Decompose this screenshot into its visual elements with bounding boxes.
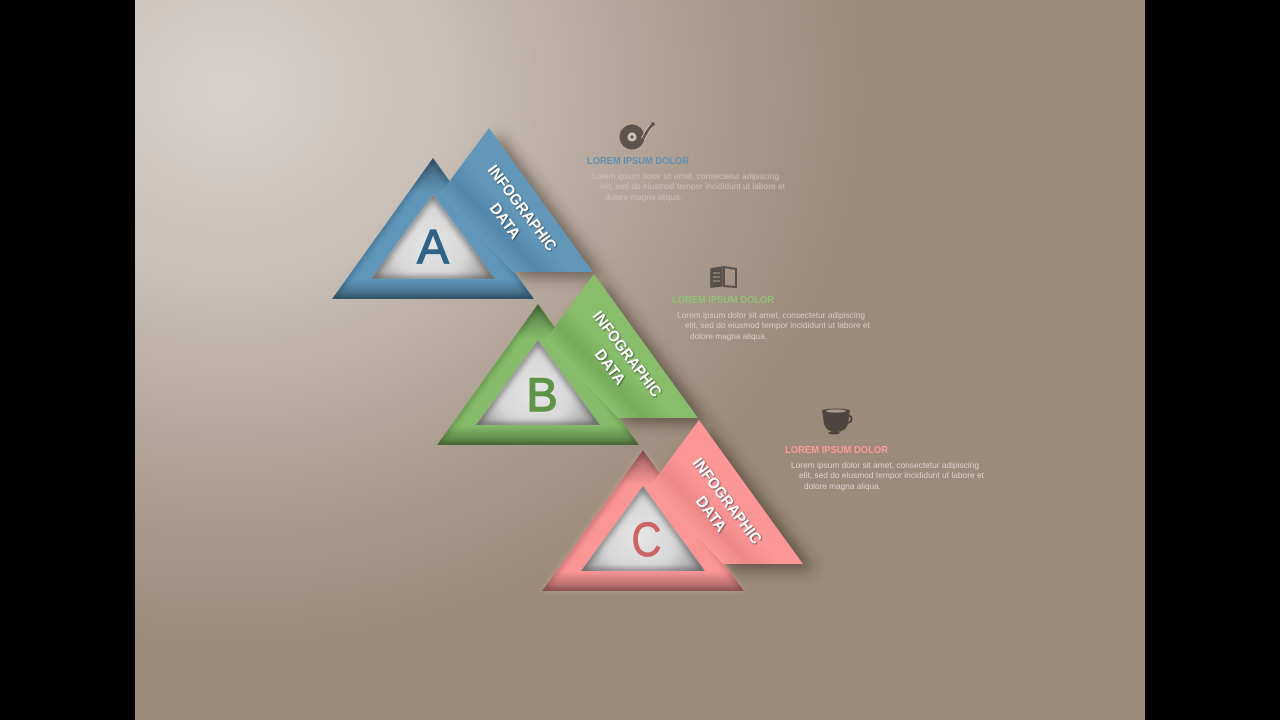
- body C: elit, sed do eiusmod tempor incididunt ut labore et: [799, 470, 985, 480]
- ribbon label B: INFOGRAPHIC: [589, 308, 664, 401]
- ribbon label C: DATA: [692, 493, 729, 535]
- triangle frame C: [542, 450, 744, 591]
- text block C: [785, 445, 985, 491]
- heading B: LOREM IPSUM DOLOR: [672, 295, 775, 306]
- body B: Lorem ipsum dolor sit amet, consectetur adipiscing: [677, 310, 865, 320]
- body C: dolore magna aliqua.: [804, 481, 881, 491]
- body A: dolore magna aliqua.: [605, 192, 682, 202]
- ribbon A: [440, 128, 593, 272]
- frame bevel C: [542, 450, 744, 591]
- icon: open book: [711, 267, 736, 287]
- icon: coffee cup: [822, 408, 852, 434]
- body B: [677, 310, 871, 341]
- icon: turntable record: [620, 122, 655, 150]
- inner triangle C: [581, 486, 705, 571]
- ribbon label A: INFOGRAPHIC: [484, 162, 559, 255]
- inner triangle A: [371, 194, 495, 279]
- triangle group A: [320, 128, 605, 305]
- heading A: LOREM IPSUM DOLOR: [587, 156, 690, 167]
- text block B: [672, 295, 871, 341]
- ribbon shadow A: [450, 134, 605, 278]
- heading C: LOREM IPSUM DOLOR: [785, 445, 889, 456]
- inner bevel C: [581, 486, 705, 571]
- ribbon B: [545, 274, 698, 418]
- ribbon label A: DATA: [486, 200, 523, 242]
- body A: [592, 171, 786, 202]
- inner bevel B: [476, 340, 600, 425]
- body B: elit, sed do eiusmod tempor incididunt ut labore et: [685, 320, 871, 330]
- ribbon shadow C: [660, 426, 815, 570]
- triangle frame B: [437, 304, 639, 445]
- frame bevel B: [437, 304, 639, 445]
- letter B: B: [526, 368, 558, 421]
- body B: dolore magna aliqua.: [690, 331, 767, 341]
- body A: Lorem ipsum dolor sit amet, consectetur adipiscing: [592, 171, 779, 181]
- letter A: A: [417, 221, 449, 274]
- infographic canvas: [332, 122, 984, 592]
- inner bevel A: [371, 194, 495, 279]
- ribbon label B: DATA: [591, 346, 628, 388]
- inner triangle B: [476, 340, 600, 425]
- triangle group B: [425, 274, 710, 451]
- outer frame glow C: [542, 450, 744, 591]
- body C: Lorem ipsum dolor sit amet, consectetur adipiscing: [791, 460, 979, 470]
- background panel: [135, 0, 1145, 720]
- body A: elit, sed do eiusmod tempor incididunt ut labore et: [600, 181, 786, 191]
- ribbon shadow B: [555, 280, 710, 424]
- triangle group C: [530, 420, 815, 597]
- ribbon C: [650, 420, 803, 564]
- frame bevel A: [332, 158, 534, 299]
- triangle frame A: [332, 158, 534, 299]
- letter C: C: [632, 514, 662, 567]
- body C: [791, 460, 985, 491]
- ribbon label C: INFOGRAPHIC: [689, 455, 764, 548]
- text block A: [587, 156, 786, 202]
